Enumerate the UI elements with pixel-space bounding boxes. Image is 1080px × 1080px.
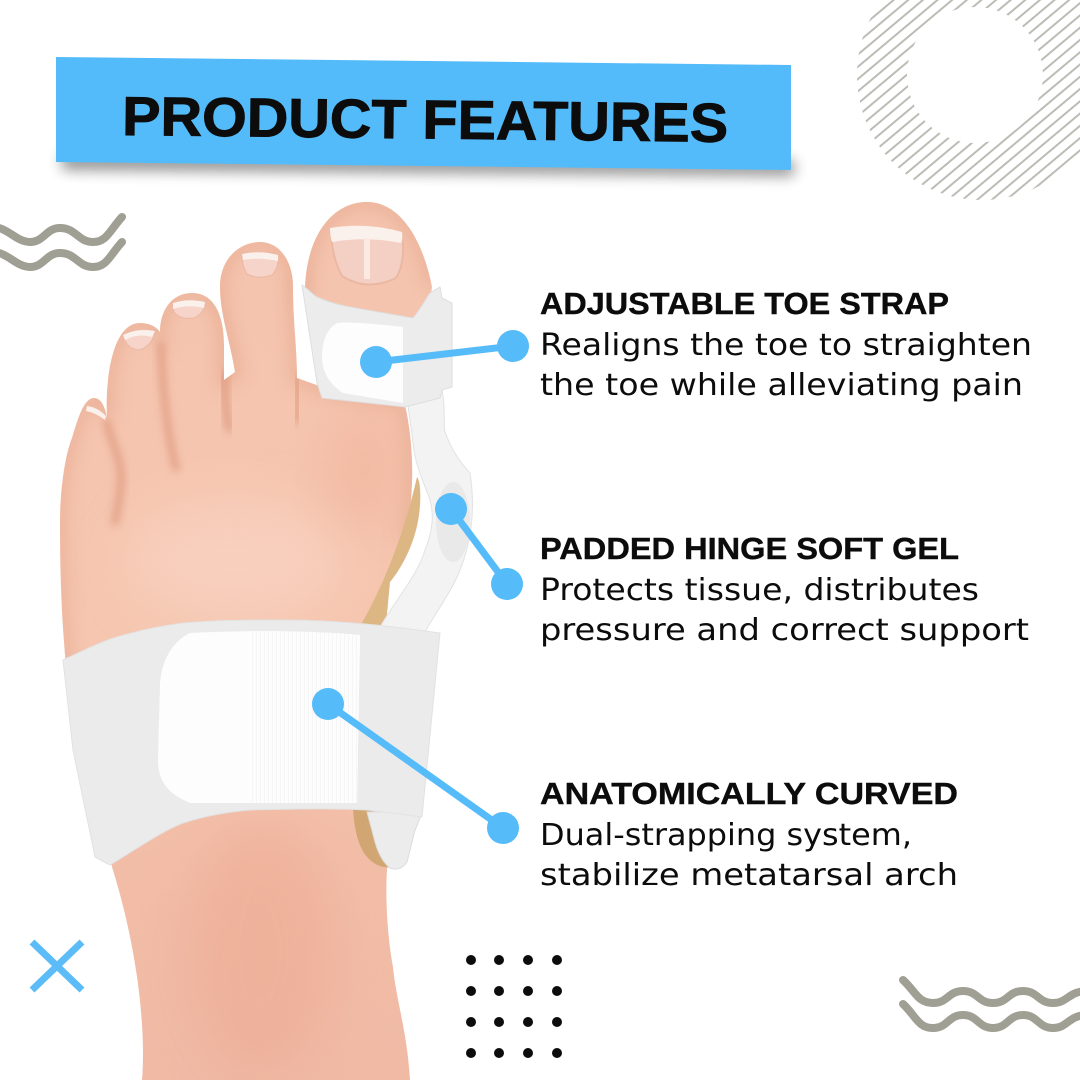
feature: adjustable toe strap: the toe while alleviating pain <box>540 368 1023 403</box>
callout line: curved strap <box>312 688 519 844</box>
title: PRODUCT FEATURES <box>122 85 729 154</box>
callout line: toe strap <box>360 330 529 378</box>
feature: anatomically curved: ANATOMICALLY CURVED <box>540 776 958 811</box>
hinge splint: white arm <box>377 390 472 632</box>
toe strap velcro patch <box>322 322 403 403</box>
feature: anatomically curved <box>540 776 958 893</box>
feature: anatomically curved: stabilize metatarsal arch <box>540 858 958 893</box>
toenails <box>86 226 403 420</box>
decoration: dot grid <box>466 955 562 1058</box>
feature: adjustable toe strap: ADJUSTABLE TOE STRAP <box>540 286 949 321</box>
foot illustration <box>60 202 472 1080</box>
feature: padded hinge soft gel: pressure and correct support <box>540 613 1029 648</box>
decoration: top-left waves <box>0 217 122 267</box>
callout line: hinge <box>435 493 523 600</box>
strap velcro patch <box>158 631 360 803</box>
decoration: bottom-right waves <box>903 980 1080 1028</box>
feature: adjustable toe strap: Realigns the toe to straighten <box>540 328 1032 363</box>
icon: blue cross <box>32 942 82 990</box>
toe strap <box>302 285 452 407</box>
feature: adjustable toe strap <box>540 286 1032 403</box>
feature: padded hinge soft gel: PADDED HINGE SOFT GEL <box>540 531 959 566</box>
decoration: hatched ring <box>857 0 1080 200</box>
title banner <box>56 57 794 176</box>
feature: anatomically curved: Dual-strapping system, <box>540 818 912 853</box>
metatarsal strap <box>63 620 440 865</box>
feature: padded hinge soft gel: Protects tissue, distributes <box>540 573 979 608</box>
hinge splint: gold pad <box>353 477 420 868</box>
foot silhouette with toes <box>60 202 432 1080</box>
feature: padded hinge soft gel <box>540 531 1029 648</box>
lower hinge tip <box>367 812 422 869</box>
